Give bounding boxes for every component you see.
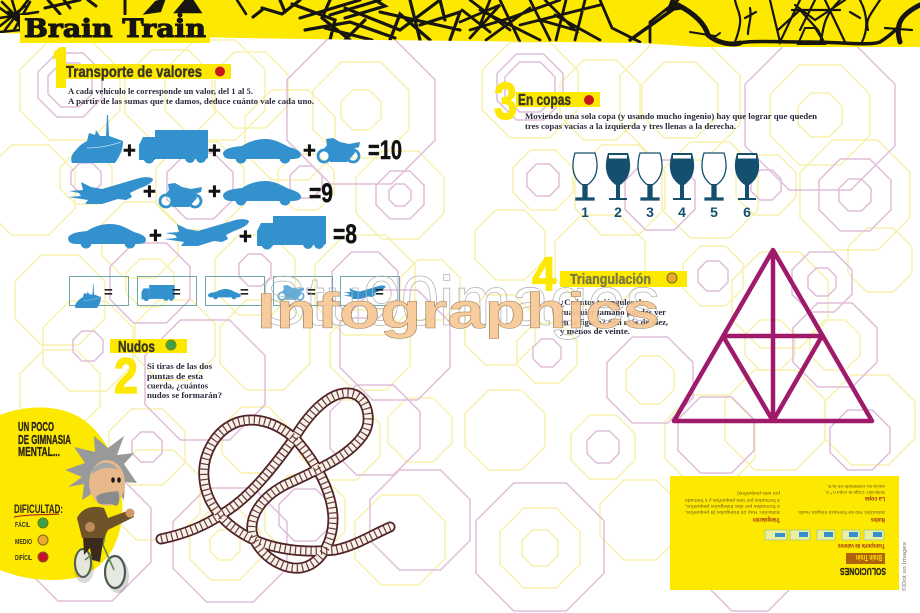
- equation row 2: [68, 177, 333, 208]
- solution 2: Solución: No se formará ningún nudo.: [797, 510, 885, 515]
- difficulty legend: MEDIO: [15, 539, 32, 546]
- solution 3: [825, 484, 885, 501]
- solution 4: [684, 491, 780, 522]
- heading bar: [110, 339, 187, 356]
- number 2: 2: [114, 348, 138, 404]
- instructions: [68, 87, 314, 106]
- equation row 2: +: [208, 179, 221, 204]
- sidebar heading: UN POCO: [18, 420, 54, 434]
- solutions heading: SOLUCIONES: [840, 565, 886, 576]
- instructions: Moviendo una sola copa (y usando mucho ingenio) hay que lograr que queden: [525, 112, 818, 121]
- six glasses: 4: [678, 204, 686, 220]
- number 3: 3: [494, 73, 517, 131]
- solution 4: 3 formados por tres pequeños y 1 formado: [684, 498, 780, 503]
- equation row 1: +: [123, 138, 136, 163]
- solution 3: vacía su contenido en la 5.: [827, 484, 885, 489]
- sidebar heading: [18, 420, 71, 459]
- six glasses: 5: [710, 204, 718, 220]
- six glasses: 1: [581, 204, 589, 220]
- solution 4: por seis pequeños): [736, 491, 780, 496]
- equation row 1: [71, 115, 402, 165]
- instructions: tres copas vacías a la izquierda y tres llenas a la derecha.: [525, 122, 736, 131]
- panel: en copas: [494, 73, 818, 220]
- difficulty legend: DIFICULTAD:: [14, 502, 63, 516]
- answer boxes: =: [104, 284, 113, 301]
- equation row 3: +: [239, 224, 252, 249]
- solution 4: Solución: Hay 16 triángulos (8 pequeños,: [685, 510, 780, 515]
- solution 1: [765, 530, 885, 548]
- solution 2: Nudos: [871, 516, 885, 522]
- equation row 3: +: [149, 223, 162, 248]
- heading bar: En copas: [518, 92, 571, 109]
- answer boxes: =: [307, 284, 316, 301]
- panel: soluciones (upside down): [670, 476, 899, 590]
- number 4: 4: [532, 247, 556, 300]
- equation row 2: +: [143, 179, 156, 204]
- question: cualquier tamaño puedes ver: [560, 308, 666, 317]
- solution 1: Transporte de valores: [838, 542, 885, 548]
- icon: einstein on a bicycle: [65, 436, 137, 593]
- six glasses: 3: [646, 204, 654, 220]
- heading bar: Transporte de valores: [66, 64, 202, 81]
- equation row 1: +: [208, 138, 221, 163]
- solution 2: [797, 510, 885, 522]
- equation row 1: =10: [368, 135, 402, 165]
- six glasses: 6: [743, 204, 751, 220]
- equation row 2: =9: [309, 178, 333, 208]
- answer boxes: =: [375, 284, 384, 301]
- six glasses: 2: [614, 204, 622, 220]
- question: ¿Cuántos triángulos de: [560, 298, 645, 307]
- brain train tag: Brain Train: [856, 553, 882, 562]
- question: cuerda, ¿cuántos: [147, 382, 208, 390]
- equation row 1: +: [303, 138, 316, 163]
- heading bar: Nudos: [118, 339, 155, 356]
- question: nudos se formarán?: [147, 391, 222, 400]
- solution 3: Solución: Coge la copa n.º 2,: [825, 490, 885, 495]
- difficulty legend: FÁCIL: [15, 520, 31, 529]
- panel: triangulación: [532, 247, 872, 421]
- question: en la figura? Son más de diez,: [560, 318, 668, 327]
- sidebar heading: DE GIMNASIA: [18, 433, 71, 447]
- panel: transporte de valores: [53, 47, 402, 308]
- answer boxes: =: [240, 284, 249, 301]
- watermark: Stu90images: [260, 262, 660, 340]
- question: y menos de veinte.: [560, 327, 630, 336]
- number 1: [53, 47, 66, 88]
- solution 3: La copa: [864, 495, 885, 501]
- rope knot: [161, 393, 390, 568]
- question: Si tiras de las dos: [147, 362, 212, 371]
- sidebar heading: MENTAL...: [18, 445, 60, 459]
- equation row 3: [68, 216, 357, 250]
- instructions: A partir de las sumas que te damos, deduce cuánto vale cada uno.: [68, 97, 314, 106]
- solution 4: 4 formados por dos triángulos pequeños,: [685, 504, 780, 509]
- solution 4: Triangulación: [753, 516, 780, 522]
- instructions: [525, 112, 818, 131]
- difficulty legend: DIFÍCIL: [15, 553, 33, 562]
- watermark: Infographics: [257, 283, 660, 339]
- answer boxes: [70, 276, 400, 308]
- panel: dificultad sidebar: [0, 407, 137, 593]
- brain train tag: [846, 553, 885, 564]
- title: Brain Train: [24, 14, 206, 44]
- question: [147, 362, 222, 400]
- instructions: A cada vehículo le corresponde un valor, del 1 al 5.: [68, 87, 253, 96]
- question: [560, 298, 668, 336]
- triangle figure: [674, 250, 872, 421]
- panel: nudos: [110, 339, 390, 568]
- equation row 3: =8: [333, 219, 357, 249]
- heading bar: Triangulación: [570, 271, 651, 288]
- credit: ©Dot xo Images: [901, 542, 908, 591]
- difficulty legend: [14, 502, 63, 562]
- answer boxes: =: [172, 284, 181, 301]
- yellow blob: [0, 407, 122, 580]
- yellow header band with black scribbles: [0, 0, 920, 47]
- six glasses: [573, 153, 759, 220]
- question: puntas de esta: [147, 372, 203, 381]
